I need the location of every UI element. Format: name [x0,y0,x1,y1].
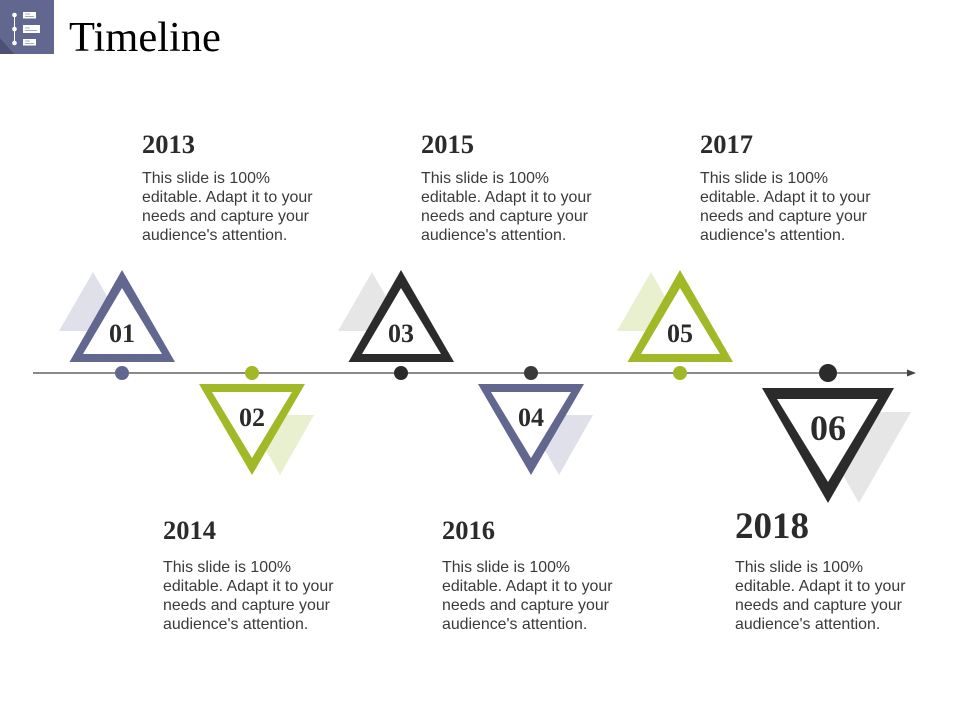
marker 01 [59,270,175,380]
block 2013: editable. Adapt it to your [142,189,312,206]
block 2015 [421,129,592,244]
block 2017: 2017 [700,129,753,159]
block 2014 [163,515,334,633]
marker 02 [199,366,314,475]
block 2015: This slide is 100% [421,170,549,187]
marker 05: 05 [667,319,693,348]
block 2015: editable. Adapt it to your [421,189,592,206]
block 2017: editable. Adapt it to your [700,189,870,206]
block 2014: 2014 [163,515,216,545]
marker 04: 04 [518,403,544,432]
block 2014: This slide is 100% [163,559,291,576]
block 2013: audience's attention. [142,227,287,244]
block 2016: audience's attention. [442,616,587,633]
block 2016: needs and capture your [442,597,609,614]
block 2017 [700,129,870,244]
block 2014: needs and capture your [163,597,330,614]
block 2016: This slide is 100% [442,559,570,576]
marker 01: 01 [109,319,135,348]
title: Timeline [69,14,221,61]
timeline axis arrow [33,370,916,376]
block 2014: audience's attention. [163,616,308,633]
block 2018: 2018 [735,506,809,547]
block 2013: needs and capture your [142,208,309,225]
block 2018: This slide is 100% [735,559,863,576]
block 2014: editable. Adapt it to your [163,578,334,595]
marker 06: 06 [810,408,846,448]
block 2016 [442,515,612,633]
block 2013: 2013 [142,129,195,159]
block 2016: editable. Adapt it to your [442,578,612,595]
block 2013 [142,129,312,244]
block 2015: 2015 [421,129,474,159]
marker 03: 03 [388,319,414,348]
block 2018: editable. Adapt it to your [735,578,906,595]
marker 06 [762,364,911,503]
icon: timeline list [0,0,54,54]
block 2015: audience's attention. [421,227,566,244]
block 2017: needs and capture your [700,208,867,225]
marker 03 [338,270,454,380]
block 2017: This slide is 100% [700,170,828,187]
marker 05 [617,270,733,380]
marker 02: 02 [239,403,265,432]
block 2018 [735,506,906,633]
marker 04 [478,366,593,475]
block 2015: needs and capture your [421,208,588,225]
block 2017: audience's attention. [700,227,845,244]
block 2018: audience's attention. [735,616,880,633]
block 2013: This slide is 100% [142,170,270,187]
block 2018: needs and capture your [735,597,902,614]
block 2016: 2016 [442,515,495,545]
